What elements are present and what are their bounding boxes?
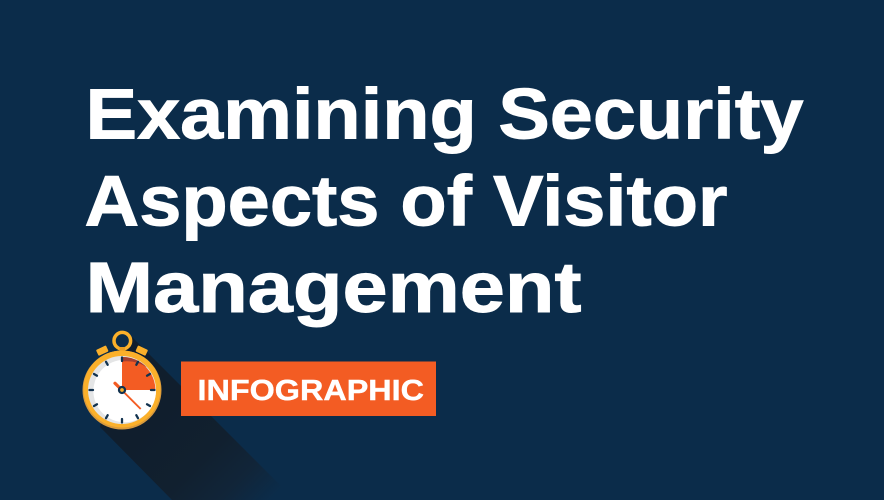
hand [115, 383, 141, 409]
hub [119, 387, 125, 393]
dial face [93, 360, 156, 422]
side buttons [96, 345, 109, 356]
stem [120, 347, 125, 352]
title: Examining Security [86, 76, 804, 154]
title: Aspects of Visitor [84, 162, 728, 242]
case shade [82, 350, 162, 430]
label: infographic [181, 362, 436, 416]
long shadow of stopwatch [100, 337, 295, 500]
tick marks [90, 358, 154, 422]
case [84, 350, 160, 428]
title [84, 76, 804, 328]
icon: stopwatch [82, 332, 162, 430]
dial rim [88, 356, 156, 424]
title: Management [86, 249, 582, 328]
orange sector [122, 357, 156, 390]
label: infographic: INFOGRAPHIC [198, 375, 424, 407]
crown ring [114, 332, 131, 349]
